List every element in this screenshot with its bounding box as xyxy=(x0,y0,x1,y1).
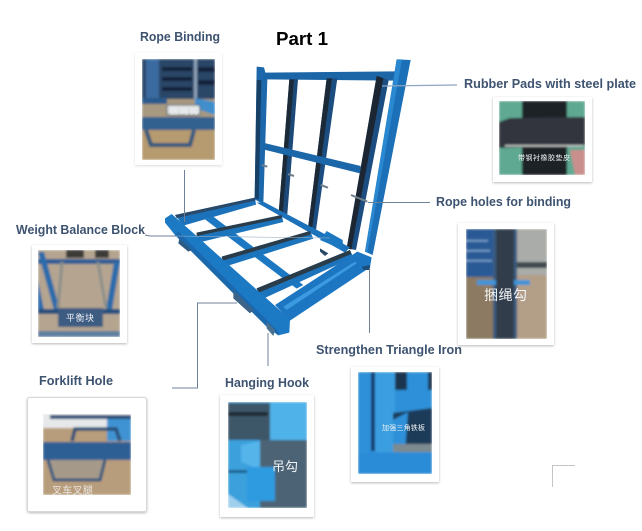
heading: Rubber Pads with steel plate: Rubber Pads with steel plate xyxy=(464,76,636,91)
heading: Rope holes for binding: Rope holes for binding xyxy=(436,194,571,209)
front left rail xyxy=(165,214,290,335)
dark vertical pads xyxy=(279,79,298,214)
photo card: Rope Binding: 捆绳钩 xyxy=(170,106,198,116)
heading: Rope Binding: Rope Binding xyxy=(140,29,220,44)
heading: Strengthen Triangle Iron: Strengthen Triangle Iron xyxy=(316,342,462,357)
right back rail xyxy=(257,202,350,253)
photo card: Hanging Hook: 吊勾 xyxy=(272,459,298,474)
photo card: Weight Balance Block: 平衡块 xyxy=(66,312,94,323)
photo card: Strengthen Triangle Iron xyxy=(351,367,439,482)
photo card: Rope Binding xyxy=(135,53,222,165)
heading: Weight Balance Block: Weight Balance Block xyxy=(16,222,146,237)
photo card: Hanging Hook xyxy=(220,395,314,517)
forklift pockets and feet xyxy=(233,290,253,313)
photo card: Rope holes for binding xyxy=(458,223,554,345)
corner mark xyxy=(552,466,575,487)
front right rail xyxy=(275,252,372,321)
photo card: Rubber Pads with steel plate: 带钢衬橡胶垫皮 xyxy=(518,153,570,162)
middle cross bar xyxy=(262,142,361,173)
title: Part 1 xyxy=(276,29,328,49)
top bar xyxy=(263,71,397,81)
photo card: Rope holes for binding: 捆绳勾 xyxy=(484,287,527,303)
rope hooks xyxy=(262,165,367,202)
centre rail xyxy=(205,217,303,289)
photo card: Forklift Hole xyxy=(28,398,146,512)
leader lines xyxy=(145,85,457,388)
main illustration: blue stillage rack xyxy=(165,59,411,336)
photo card: Rubber Pads with steel plate xyxy=(493,97,592,182)
photo card: Weight Balance Block xyxy=(32,245,127,343)
heading: Forklift Hole: Forklift Hole xyxy=(39,373,113,388)
heading: Hanging Hook: Hanging Hook xyxy=(225,375,310,390)
right post xyxy=(365,59,411,255)
back rail xyxy=(175,198,256,226)
photo card: Strengthen Triangle Iron: 加强三角铁板 xyxy=(382,423,425,432)
left post xyxy=(255,67,267,204)
photo card: Forklift Hole: 叉车叉腿 xyxy=(52,484,93,497)
slats xyxy=(197,215,283,243)
